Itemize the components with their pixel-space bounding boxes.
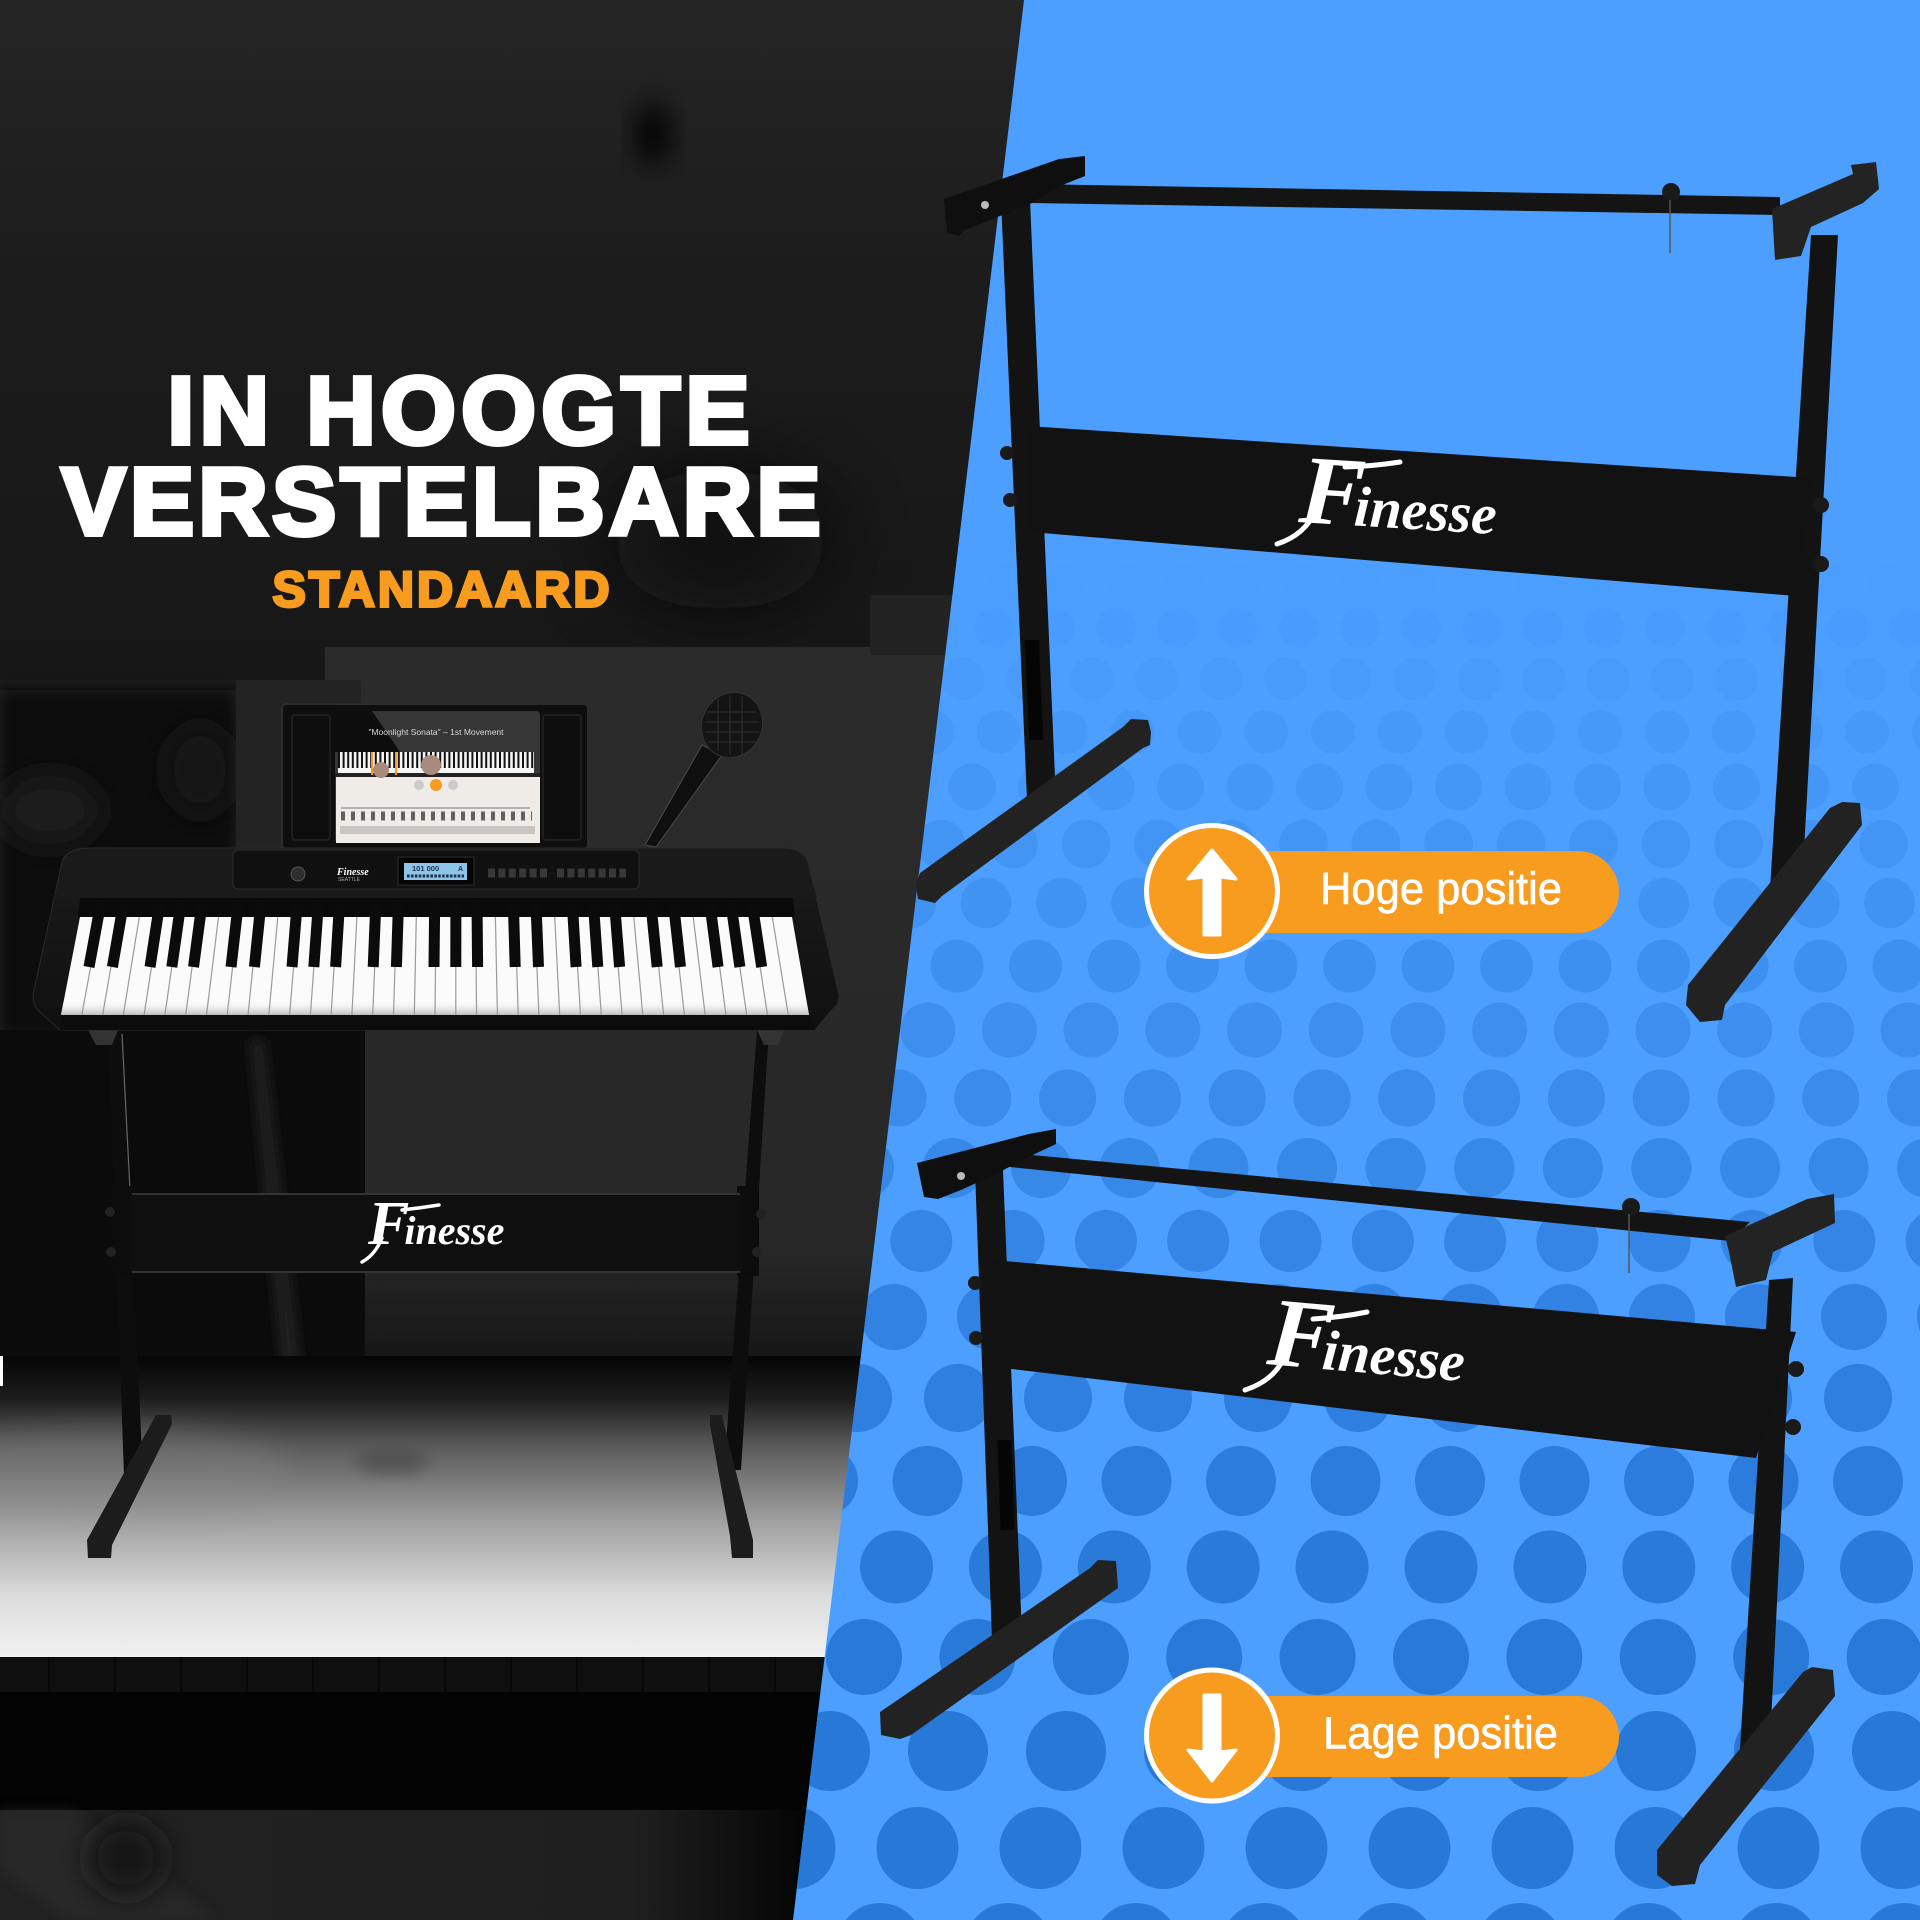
top stand: high position	[916, 156, 1879, 1022]
title	[62, 358, 820, 618]
control panel: Finesse	[336, 867, 369, 878]
panel: blue background	[793, 0, 1920, 1920]
white keys	[61, 917, 809, 1015]
badge: high position	[1146, 826, 1619, 956]
LCD display: A	[458, 866, 463, 873]
badge: low position	[1146, 1670, 1619, 1801]
panel: dark photo background	[0, 0, 1025, 1920]
heading line 2: VERSTELBARE	[62, 448, 820, 556]
music stand with tablet	[282, 704, 588, 849]
bottom stand: low position	[880, 1129, 1835, 1886]
control panel	[233, 850, 639, 889]
speaker strip	[54, 850, 817, 898]
label: Hoge positie	[1320, 863, 1562, 914]
stand logo: Finesse	[367, 1190, 504, 1258]
label: Lage positie	[1323, 1708, 1558, 1758]
heading line 1: IN HOOGTE	[168, 358, 750, 464]
stand under keyboard	[87, 1030, 784, 1558]
control panel: SEATTLE	[338, 877, 361, 883]
LCD display	[404, 863, 467, 880]
stand crossbar	[993, 1260, 1796, 1458]
stand crossbar	[1028, 426, 1811, 596]
tablet screen: "Moonlight Sonata" – 1st Movement	[368, 727, 504, 737]
product: keyboard on stand	[33, 682, 839, 1558]
background dot pattern	[796, 764, 1920, 1920]
black keys	[89, 902, 762, 967]
icon: up arrow	[1188, 850, 1236, 935]
stand logo: Finesse	[1263, 1278, 1471, 1403]
stand logo: Finesse	[1296, 436, 1501, 556]
tablet screen	[335, 711, 540, 843]
front lip	[60, 1015, 815, 1030]
key felt strip	[78, 898, 795, 917]
microphone	[645, 682, 773, 847]
keyboard body	[33, 848, 839, 1030]
icon: down arrow	[1188, 1695, 1236, 1781]
LCD display: 101 000	[412, 864, 439, 873]
subheading: STANDAARD	[272, 562, 610, 618]
